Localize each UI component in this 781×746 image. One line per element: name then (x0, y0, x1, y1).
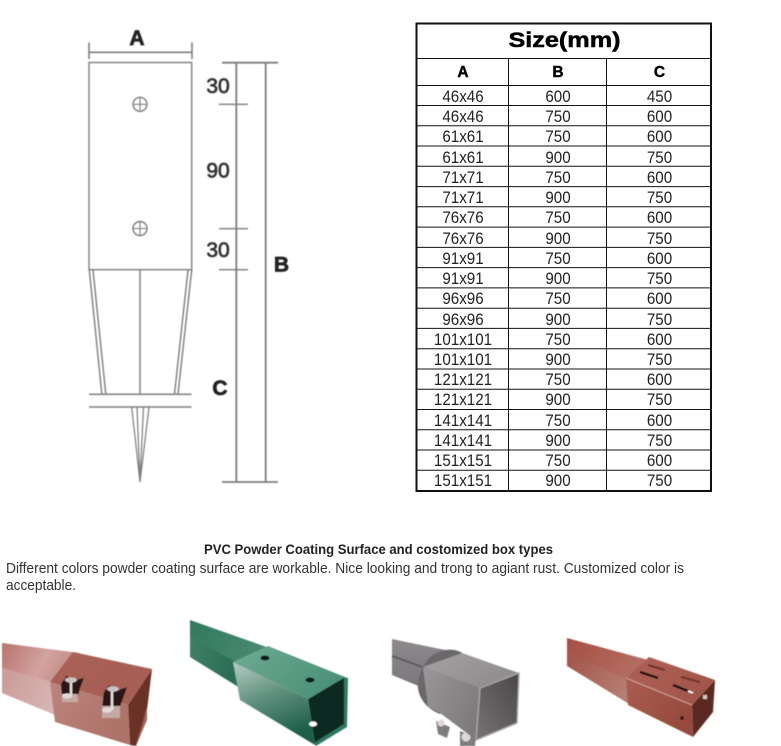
table column A: 61x61 (442, 128, 484, 146)
table column A: 96x96 (442, 290, 484, 308)
table column C: 750 (647, 270, 672, 288)
table column B: 750 (545, 452, 571, 470)
table column C: 600 (647, 412, 672, 430)
table column B: 900 (545, 149, 571, 167)
table column C: 600 (647, 169, 672, 187)
dimension labels: 90 (206, 160, 230, 183)
dimension labels: 30 (206, 239, 230, 262)
table column C: 600 (647, 209, 672, 227)
table column A: 141x141 (434, 412, 492, 430)
column headers (457, 64, 665, 81)
table column A: 76x76 (442, 230, 484, 248)
section description: acceptable. (6, 578, 76, 594)
table column C: 750 (647, 149, 672, 167)
table column B: 750 (545, 209, 571, 227)
section description: Different colors powder coating surface are workable. Nice looking and trong to agiant rust. Customized color is (6, 561, 684, 577)
section description (6, 561, 684, 594)
dimension labels: B (274, 254, 289, 276)
table column C: 600 (647, 108, 672, 126)
table column A: 71x71 (442, 169, 484, 187)
table column C: 600 (647, 290, 672, 308)
table column B: 750 (545, 371, 571, 389)
table column A: 91x91 (442, 270, 484, 288)
table column A: 101x101 (434, 351, 492, 369)
table column B: 750 (545, 128, 571, 146)
photo: green box (190, 620, 348, 746)
table column B: 900 (545, 230, 571, 248)
column headers: A (457, 64, 469, 81)
section heading: PVC Powder Coating Surface and costomized box types (204, 542, 553, 557)
photo: red box with bolts (2, 643, 152, 746)
table column C: 600 (647, 331, 672, 349)
dimension A (89, 27, 192, 59)
table column A: 46x46 (442, 108, 484, 126)
table title: Size(mm) (508, 29, 620, 52)
table column C: 750 (647, 391, 672, 409)
table column C: 750 (647, 351, 672, 369)
table column A: 101x101 (434, 331, 492, 349)
table grid (416, 24, 711, 491)
table column A: 121x121 (434, 391, 492, 409)
table column A: 71x71 (442, 189, 484, 207)
table column C: 750 (647, 230, 672, 248)
table column A: 46x46 (442, 88, 484, 106)
photo: brown slotted box (567, 638, 715, 737)
table column C: 600 (647, 128, 672, 146)
table column A: 96x96 (442, 311, 484, 329)
table column A: 91x91 (442, 250, 484, 268)
table column B: 600 (545, 88, 571, 106)
table column C: 600 (647, 452, 672, 470)
table column B: 750 (545, 169, 571, 187)
table column B: 900 (545, 432, 571, 450)
table column C: 750 (647, 189, 672, 207)
dimension A: A (129, 27, 145, 50)
table column B: 750 (545, 331, 571, 349)
table column A: 121x121 (434, 371, 492, 389)
technical drawing of post support (89, 27, 289, 482)
table column A: 151x151 (434, 472, 492, 490)
table column B: 750 (545, 412, 571, 430)
dimension labels (206, 75, 289, 400)
table column C: 450 (647, 88, 672, 106)
table column C: 600 (647, 250, 672, 268)
table column B: 900 (545, 472, 571, 490)
photo: grey box with flange (392, 639, 519, 746)
table column B: 900 (545, 391, 571, 409)
table column B: 900 (545, 270, 571, 288)
table column B (545, 88, 571, 490)
dimension labels: C (212, 377, 228, 400)
box outline with holes (89, 62, 192, 270)
size table (416, 24, 711, 491)
table column C: 750 (647, 311, 672, 329)
table column A: 151x151 (434, 452, 492, 470)
table column B: 750 (545, 290, 571, 308)
table column A: 141x141 (434, 432, 492, 450)
column headers: C (654, 64, 665, 81)
table column C: 750 (647, 472, 672, 490)
table column A: 76x76 (442, 209, 484, 227)
spike body (89, 270, 192, 482)
table column B: 750 (545, 108, 571, 126)
column headers: B (552, 64, 564, 81)
table column A: 61x61 (442, 149, 484, 167)
table column B: 900 (545, 351, 571, 369)
table column C: 750 (647, 432, 672, 450)
table column B: 750 (545, 250, 571, 268)
table column C: 600 (647, 371, 672, 389)
dimension ladder (219, 63, 278, 482)
table column B: 900 (545, 311, 571, 329)
table column C (647, 88, 672, 490)
dimension labels: 30 (206, 75, 230, 98)
table column A (434, 88, 492, 490)
table column B: 900 (545, 189, 571, 207)
